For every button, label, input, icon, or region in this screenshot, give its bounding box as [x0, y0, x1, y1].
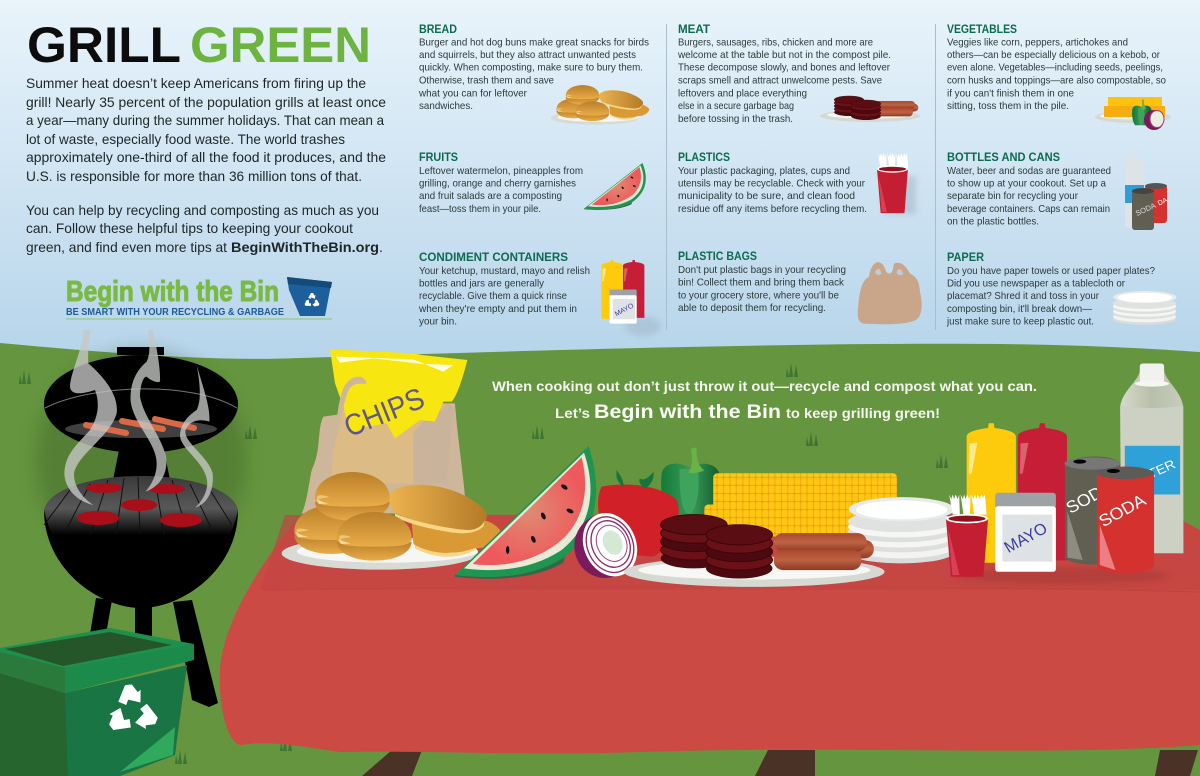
grass tufts	[19, 363, 948, 764]
intro text block	[26, 75, 386, 255]
body text: fruits: and fruit salads are a composting	[419, 190, 562, 202]
call to action text: to keep grilling green!	[786, 405, 940, 421]
grill	[36, 330, 246, 707]
bin rim front	[65, 644, 194, 693]
body text: meat: welcome at the table but not in the compost pile.	[677, 49, 891, 61]
body text: paper: placemat? Shred it and toss in your	[947, 290, 1099, 302]
body text: meat: leftovers and place everything	[678, 88, 807, 100]
body text: paper: just make sure to keep plastic out.	[946, 316, 1094, 328]
body text: bottles and cans: beverage containers. Caps can remain	[947, 203, 1110, 215]
icon: recycle symbol	[100, 681, 164, 739]
body text: vegetables: Veggies like corn, peppers, artichokes and	[947, 36, 1128, 48]
grey soda can	[1062, 456, 1120, 565]
table shadow under drinks	[954, 568, 1168, 584]
smoke	[64, 330, 213, 508]
body text: bottles and cans	[947, 165, 1111, 228]
grill legs	[89, 598, 218, 707]
body text: paper: Do you have paper towels or used paper plates?	[947, 265, 1155, 277]
food, right group	[624, 363, 1183, 587]
body text: bottles and cans: separate bin for recycling your	[947, 190, 1078, 202]
body text: vegetables	[947, 36, 1166, 112]
icon: blue recycling bin	[287, 277, 332, 316]
heading: bread: BREAD	[419, 22, 457, 36]
icon: meat on plate	[820, 96, 920, 122]
call to action text: Let’s	[555, 405, 590, 421]
body text: condiment containers: your bin.	[419, 316, 457, 328]
body text: condiment containers	[418, 265, 590, 328]
heading: plastic bags: PLASTIC BAGS	[678, 249, 757, 263]
intro text block: .	[379, 239, 383, 255]
body text: bread	[418, 36, 649, 112]
body text: bread: sandwiches.	[419, 100, 473, 112]
bin highlight	[120, 727, 175, 772]
food, left group	[282, 349, 679, 585]
intro text block: a year—many during the summer holidays. That can mean a	[26, 112, 384, 128]
grass hillside	[0, 343, 1200, 776]
heading: bottles and cans: BOTTLES AND CANS	[947, 150, 1060, 164]
tip: fruits	[419, 150, 646, 215]
body text: plastics: residue off any items before recycling them.	[678, 203, 867, 215]
icon: buns on plate	[551, 85, 649, 125]
column dividers	[666, 24, 936, 330]
icon: water bottle and soda cans	[1125, 153, 1169, 230]
body text: fruits: feast—toss them in your pile.	[419, 203, 541, 215]
buns on plate	[282, 472, 501, 570]
body text: meat: before tossing in the trash.	[678, 113, 793, 125]
tip: condiment containers	[418, 250, 661, 336]
green pepper	[661, 447, 721, 514]
body text: meat: These decompose slowly, and bones and leftover	[678, 62, 890, 74]
tip: paper	[946, 250, 1176, 328]
tip: bread	[418, 22, 649, 125]
grill lid	[44, 355, 238, 453]
ketchup bottle	[1018, 423, 1067, 560]
body text: plastic bags: able to deposit them for recycling.	[678, 302, 826, 314]
title	[27, 17, 371, 73]
lower grate	[44, 476, 238, 535]
title: GREEN	[190, 17, 371, 73]
body text: paper	[946, 265, 1155, 328]
icon: condiment bottles and mayo jar	[602, 260, 661, 336]
heading: meat: MEAT	[678, 22, 711, 36]
chips bag: CHIPS	[340, 382, 429, 444]
body text: vegetables: if you can't finish them in one	[947, 88, 1074, 100]
mustard bottle	[967, 423, 1016, 563]
icon: watermelon slice	[584, 163, 646, 210]
icon: plastic bag	[858, 262, 922, 324]
call to action text: Begin with the Bin	[594, 402, 781, 423]
body text: bread: Burger and hot dog buns make great snacks for birds	[419, 36, 649, 48]
tip: vegetables	[947, 22, 1171, 130]
body text: bread: what you can for leftover	[418, 88, 527, 100]
recycling bin	[0, 628, 194, 776]
sky background	[0, 0, 1200, 360]
intro text block: approximately one-third of all the food it produces, and the	[26, 149, 386, 165]
water bottle	[1120, 363, 1183, 553]
intro text block: grill! Nearly 35 percent of the population grills at least once	[26, 94, 386, 110]
heading: condiment containers: CONDIMENT CONTAINERS	[419, 250, 568, 264]
tablecloth	[220, 514, 1200, 753]
body text: bread: quickly. When composting, make sure to bury them.	[419, 62, 643, 74]
body text: vegetables: others—can be especially delicious on a kebob, or	[947, 49, 1160, 61]
icon: condiment bottles and mayo jar: MAYO	[614, 302, 636, 318]
body text: fruits: Leftover watermelon, pineapples from	[419, 165, 583, 177]
grey soda can: SODA	[1062, 477, 1117, 517]
body text: meat: else in a secure garbage bag	[678, 100, 794, 112]
grill lid handle and stem	[113, 347, 170, 480]
body text: vegetables: corn husks and toppings—are also compostable, so	[947, 74, 1166, 86]
intro text block: can. Follow these helpful tips to keeping your cookout	[26, 220, 353, 236]
bin opening	[5, 632, 172, 666]
bin rim top	[0, 628, 194, 670]
heading: plastics: PLASTICS	[678, 150, 730, 164]
body text: meat: Burgers, sausages, ribs, chicken and more are	[678, 36, 873, 48]
intro text block: Summer heat doesn’t keep Americans from firing up the	[26, 75, 366, 91]
watermelon	[455, 446, 596, 579]
burger patties on grill	[77, 483, 202, 527]
grill bowl	[44, 510, 238, 608]
tip: bottles and cans	[947, 150, 1169, 230]
body text: plastic bags: Don't put plastic bags in your recycling	[678, 264, 846, 276]
icon: water bottle and soda cans: SODA	[1134, 201, 1157, 218]
body text: bottles and cans: to show up at your cookout. Set up a	[947, 178, 1106, 190]
body text: bread: and squirrels, but they also attract unwanted pests	[419, 49, 636, 61]
call to action text	[492, 378, 1037, 423]
body text: plastics: utensils may be recyclable. Check with your	[678, 178, 865, 190]
intro text block: U.S. is responsible for more than 36 million tons of that.	[26, 168, 362, 184]
body text: plastics	[678, 165, 867, 215]
corn	[704, 473, 908, 536]
tip: plastic bags	[678, 249, 922, 324]
body text: plastic bags	[678, 264, 846, 314]
body text: fruits: grilling, orange and cherry garnishes	[419, 178, 576, 190]
icon: water bottle and soda cans: DA	[1157, 197, 1169, 207]
body text: fruits	[419, 165, 583, 215]
intro text block: lot of waste, especially food waste. The world trashes	[26, 131, 345, 147]
body text: condiment containers: when they're empty and put them in	[418, 303, 577, 315]
bin left side	[0, 673, 70, 776]
icon: stack of paper plates	[1113, 291, 1176, 325]
table legs	[362, 750, 1198, 776]
red soda can: SODA	[1095, 490, 1150, 531]
logo: Begin with the Bin: BE SMART WITH YOUR RECYCLING & GARBAGE	[66, 306, 284, 318]
body text: bread: Otherwise, trash them and save	[419, 74, 554, 86]
body text: paper: Did you use newspaper as a tablecloth or	[947, 278, 1125, 290]
plate stack	[848, 497, 955, 563]
red cup with forks	[946, 494, 988, 577]
intro text block: green, and find even more tips at	[26, 239, 227, 255]
body text: bottles and cans: Water, beer and sodas are guaranteed	[947, 165, 1111, 177]
body text: condiment containers: Your ketchup, mustard, mayo and relish	[419, 265, 590, 277]
bin front	[65, 665, 187, 776]
upper grate with hot dogs	[65, 419, 217, 438]
meat plate	[624, 515, 885, 587]
heading: vegetables: VEGETABLES	[947, 22, 1017, 36]
title: GRILL	[27, 17, 181, 73]
body text: plastics: municipality to be sure, and clean food	[678, 190, 855, 202]
grill shadow	[36, 350, 246, 570]
logo: Begin with the Bin: Begin with the Bin	[66, 276, 279, 308]
body text: plastics: Your plastic packaging, plates, cups and	[678, 165, 850, 177]
body text: plastic bags: to your grocery store, where you'll be	[678, 290, 839, 302]
icon: corn, pepper and onion	[1095, 97, 1171, 130]
body text: meat: scraps smell and attract unwelcome pests. Save	[678, 74, 882, 86]
call to action text: When cooking out don’t just throw it out—recycle and compost what you can.	[492, 378, 1037, 394]
body text: condiment containers: recyclable. Give them a quick rinse	[419, 290, 567, 302]
mayo jar: MAYO	[1001, 519, 1051, 557]
intro text block: You can help by recycling and composting as much as you	[26, 202, 379, 218]
intro text block: BeginWithTheBin.org	[231, 239, 379, 255]
body text: bottles and cans: on the plastic bottles.	[947, 216, 1039, 228]
body text: paper: composting bin, it'll break down—	[947, 303, 1092, 315]
chips bag	[302, 349, 467, 513]
mayo jar	[995, 493, 1056, 572]
body text: vegetables: even alone. Vegetables—including seeds, peelings,	[947, 62, 1163, 74]
body text: plastic bags: bin! Collect them and bring them back	[678, 276, 845, 288]
tip: plastics	[678, 150, 916, 215]
onion	[573, 504, 647, 585]
icon: red cup with forks	[877, 153, 916, 214]
body text: meat	[677, 36, 891, 125]
tip: meat	[677, 22, 920, 125]
heading: fruits: FRUITS	[419, 150, 458, 164]
heading: paper: PAPER	[947, 250, 984, 264]
water bottle: WATER	[1126, 457, 1178, 490]
tomato	[598, 470, 679, 557]
body text: vegetables: sitting, toss them in the pile.	[947, 100, 1069, 112]
red soda can	[1095, 467, 1154, 574]
bin rim left	[0, 652, 65, 693]
body text: condiment containers: bottles and jars are generally	[419, 278, 545, 290]
